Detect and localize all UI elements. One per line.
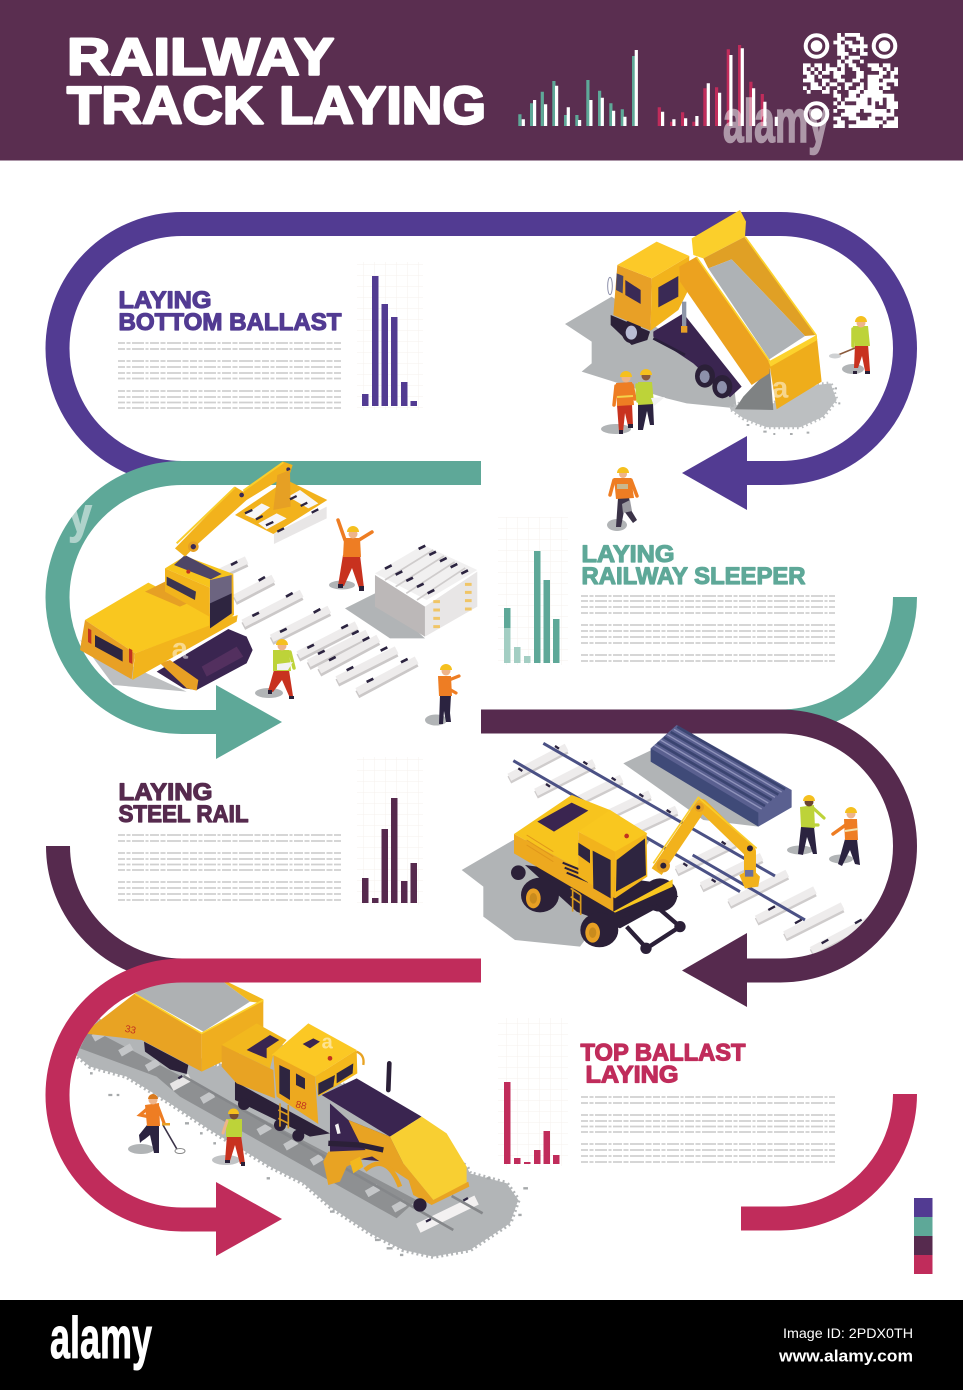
section text: laying railway sleeper: RAILWAY SLEEPER	[582, 563, 806, 590]
image id: Image ID: 2PDX0TH	[783, 1325, 913, 1341]
worker: arms raised	[329, 520, 372, 591]
title: TRACK LAYING	[67, 76, 486, 136]
scene: rail laying machine and rail stack	[511, 725, 792, 954]
worker: lime vest with plans	[637, 369, 665, 430]
worker: lime vest inspecting	[787, 795, 824, 855]
worker: with shovel	[829, 316, 870, 374]
scene: ballast train: 33	[124, 1024, 137, 1037]
section text: laying bottom ballast	[118, 287, 342, 408]
worker: orange vest	[601, 371, 635, 434]
ribbon: crimson	[57, 970, 905, 1256]
footer logo: alamy	[50, 1306, 152, 1371]
legend colour swatches	[914, 1198, 932, 1274]
bar chart: top ballast	[498, 1018, 568, 1166]
section text: laying steel rail: STEEL RAIL	[118, 801, 248, 828]
section text: laying railway sleeper	[581, 541, 835, 661]
bar chart: steel rail	[357, 757, 423, 905]
ribbon: purple	[57, 224, 905, 510]
worker: orange pointing	[425, 664, 459, 726]
header bar chart: teal and white	[518, 50, 638, 126]
title: RAILWAY	[67, 28, 334, 86]
section text: laying railway sleeper: LAYING	[582, 541, 674, 568]
title	[67, 28, 486, 136]
section text: top ballast laying: TOP BALLAST	[580, 1040, 746, 1066]
scene: excavator and sleepers: a	[172, 632, 189, 665]
worker: lime vest carrying	[255, 639, 294, 699]
ribbon: plum	[58, 722, 905, 1007]
section text: laying bottom ballast: BOTTOM BALLAST	[118, 309, 342, 336]
scene: ballast train: a	[322, 1031, 334, 1053]
footer bar	[0, 1300, 963, 1390]
section text: top ballast laying	[580, 1040, 835, 1162]
worker: metal detector	[128, 1094, 185, 1154]
worker: orange vest reaching	[829, 807, 860, 866]
header bar chart: red and white	[658, 45, 778, 126]
website: www.alamy.com	[778, 1346, 913, 1366]
section text: top ballast laying: LAYING	[586, 1062, 678, 1088]
ribbon: teal	[57, 473, 905, 759]
section text: laying bottom ballast: LAYING	[118, 287, 212, 314]
bar chart: bottom ballast	[357, 262, 423, 410]
scene: dump truck	[565, 210, 840, 434]
watermark: alamy	[723, 88, 829, 155]
worker: walking	[607, 467, 637, 531]
bar chart: railway sleeper	[498, 517, 568, 665]
scene: excavator and sleepers	[80, 462, 477, 695]
watermark: y	[68, 487, 92, 543]
scene: ballast train: 88	[294, 1099, 308, 1113]
scene: rail track under the machine	[462, 743, 870, 953]
header band	[0, 0, 963, 160]
scene: ballast train	[70, 977, 528, 1257]
section text: laying steel rail: LAYING	[118, 779, 212, 806]
worker: lime vest on ballast	[212, 1108, 245, 1166]
scene: dump truck: a	[772, 371, 789, 404]
section text: laying steel rail	[118, 779, 342, 900]
QR code	[803, 33, 898, 128]
